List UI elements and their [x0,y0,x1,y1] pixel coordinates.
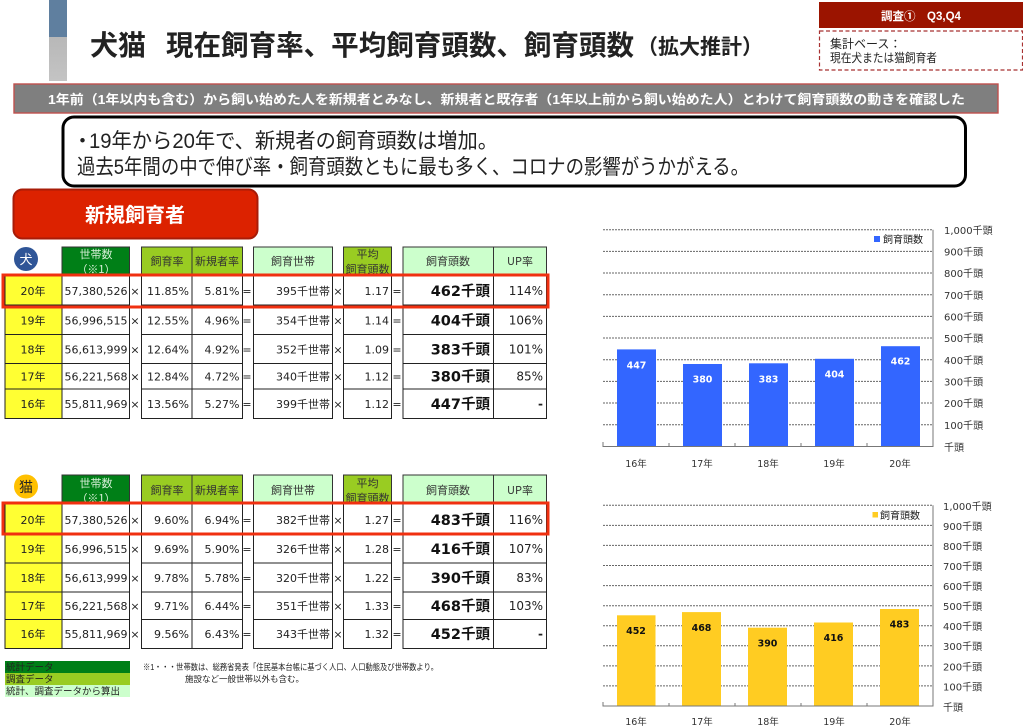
dog chart legend [874,233,923,246]
cat row 19年: 56,996,515 [65,543,128,556]
cat table header labels: 飼育世帯 [271,482,315,498]
dog row 20年: 20年 [20,284,46,298]
cat row 18年: = [242,572,252,585]
dog row 17年: × [130,370,140,384]
dog row 19年: 4.96% [205,314,240,328]
dog row 16年: 1.12 [364,398,389,411]
cat row 18年: 18年 [20,571,46,585]
cat row 20年: 57,380,526 [65,514,128,527]
dog table header labels [76,246,533,277]
dog row 16年: × [333,398,343,411]
dog row 19年: × [333,314,343,328]
cat table header labels: 新規者率 [195,482,239,498]
cat row 16年: = [392,628,402,641]
cat row 19年: 19年 [20,542,46,556]
dog row 16年 [20,396,543,413]
cat row 19年: × [130,543,140,556]
dog x axis labels: 18年 [757,458,779,470]
dog row 17年: 85% [516,370,543,384]
dog row 18年: 101% [509,342,543,356]
dog row 19年: 404千頭 [431,312,490,330]
cat table header labels: UP率 [507,482,533,498]
dog y axis labels: 1,000千頭 [944,225,993,237]
dog 2020 highlight [3,275,548,307]
dog y axis labels: 400千頭 [944,355,983,367]
decorative title strip [49,0,67,81]
cat table header labels: （※1） [76,490,116,506]
dog row 19年: 354千世帯 [276,314,330,328]
dog row 20年: × [130,285,140,298]
cat row 20年: 382千世帯 [276,514,330,527]
cat y axis labels: 200千頭 [943,662,982,674]
dog row 20年: 462千頭 [431,283,490,300]
cat row 19年: × [333,543,343,556]
legend: data source colours: 統計、調査データから算出 [6,686,120,698]
cat row 19年: 107% [509,542,543,556]
cat table cells [5,504,546,648]
title: 現在飼育率、平均飼育頭数、飼育頭数 [166,30,634,61]
cat bar values [626,620,909,650]
heading: new owners: 新規飼育者 [85,204,185,227]
cat bars [617,609,919,706]
dog x axis labels: 16年 [625,458,647,470]
cat row 16年: - [538,627,543,641]
dog y axis labels: 200千頭 [944,398,983,410]
cat row 19年 [20,541,543,558]
survey tag [819,2,1023,28]
cat row 20年: 20年 [20,513,46,527]
dog row 16年: = [392,398,402,411]
cat row 18年: 83% [516,571,543,585]
cat chart grid [603,505,933,686]
icon: cat badge [14,474,38,498]
cat row 19年: = [392,543,402,556]
dog row 19年: 12.55% [147,314,189,328]
survey tag: 調査① Q3,Q4 [881,9,962,23]
cat row 20年: 1.27 [364,514,389,527]
aggregation base box: 集計ベース： [830,36,901,51]
dog row 20年: 114% [509,284,543,298]
dog row 19年 [20,312,543,330]
cat y axis labels: 500千頭 [943,601,982,613]
cat row 18年: 320千世帯 [276,572,330,585]
dog row 16年: 447千頭 [431,396,490,413]
dog table header labels: 平均 [356,246,378,262]
dog row 18年: 12.64% [147,344,189,356]
bar chart: dogs [603,225,993,470]
dog table header labels: 飼育世帯 [271,253,315,269]
cat x axis labels [625,716,911,726]
aggregation base box: 現在犬または猫飼育者 [830,50,937,65]
dog row 17年: 12.84% [147,370,189,384]
dog row 19年: 1.14 [364,314,389,328]
dog chart grid [603,230,933,425]
cat bar values: 416 [824,633,844,644]
cat row 20年: × [333,514,343,527]
dog row 18年 [20,342,543,358]
cat row 17年: 103% [509,599,543,613]
dog row 19年: = [242,314,252,328]
cat row 16年: 452千頭 [431,626,490,643]
dog y axis labels: 900千頭 [944,246,983,258]
cat row 18年: 9.78% [154,572,189,585]
dog row 18年: 18年 [20,342,46,356]
dog row 18年: = [392,344,402,356]
dog y axis labels: 100千頭 [944,420,983,432]
cat row 18年: 5.78% [205,572,240,585]
dog y axis labels: 700千頭 [944,290,983,302]
legend: data source colours: 調査データ [6,674,54,686]
dog row 18年: × [130,344,140,356]
cat row 18年: × [130,572,140,585]
cat row 16年: = [242,628,252,641]
dog table header labels: 飼育率 [150,253,184,269]
cat row 20年 [20,512,543,529]
dog row 17年: × [333,370,343,384]
cat row 17年: 6.44% [205,600,240,613]
dog row 17年 [20,368,543,386]
dog table headers [62,247,546,275]
dog row 18年: 56,613,999 [65,344,128,356]
cat row 17年: 1.33 [364,600,389,613]
dog table header labels: （※1） [76,261,116,277]
cat y axis labels: 700千頭 [943,561,982,573]
dog y axis labels: 千頭 [944,442,964,454]
cat row 18年: × [333,572,343,585]
cat y axis labels: 400千頭 [943,621,982,633]
dog table header labels: 飼育頭数 [426,253,470,269]
dog row 18年: 4.92% [205,344,240,356]
cat bar values: 483 [890,620,909,630]
cat row 20年: 483千頭 [431,512,490,529]
cat row 19年: 1.28 [364,543,389,556]
dog row 18年: × [333,344,343,356]
cat row 17年: 351千世帯 [276,600,330,613]
cat row 16年 [20,626,543,643]
dog table cells [5,275,546,418]
cat row 17年: = [392,600,402,613]
dog row 16年: 13.56% [147,398,189,411]
cat row 18年: = [392,572,402,585]
dog bar values: 462 [891,356,910,368]
cat row 16年: 16年 [20,627,46,641]
cat row 16年: 1.32 [364,628,389,641]
cat row 17年: 9.71% [154,600,189,613]
cat row 19年: 326千世帯 [276,543,330,556]
legend: data source colours: 統計データ [6,662,54,674]
dog row 20年: = [242,285,252,298]
dog row 16年: 399千世帯 [276,398,330,411]
dog y axis labels: 800千頭 [944,268,983,280]
cat row 19年: 9.69% [154,543,189,556]
dog x axis labels [625,458,911,470]
icon: dog badge: 犬 [19,252,33,267]
cat row 19年: 416千頭 [431,541,490,558]
cat 2020 highlight [3,503,548,534]
dog x axis labels: 20年 [889,458,911,470]
dog bar values: 447 [627,360,646,372]
cat row 17年: = [242,600,252,613]
dog bar values: 404 [825,370,845,380]
cat y axis labels [943,501,992,714]
dog table header labels: 飼育頭数 [346,261,390,277]
cat y axis labels: 300千頭 [943,641,982,653]
aggregation base box [820,31,1022,70]
dog row 16年: × [130,398,140,411]
cat row 20年: = [242,514,252,527]
footnote: 施設など一般世帯以外も含む。 [185,674,304,684]
dog row 20年 [20,283,543,300]
footnote: ※1・・・世帯数は、総務省発表「住民基本台帳に基づく人口、人口動態及び世帯数より。 [143,662,438,672]
dog row 20年: 1.17 [364,285,389,298]
dog row 16年: 55,811,969 [65,398,128,411]
heading: new owners [14,190,258,238]
icon: dog badge [14,247,38,271]
dog y axis labels: 300千頭 [944,376,983,388]
dog y axis labels: 600千頭 [944,312,983,324]
cat bar values: 452 [626,626,646,637]
callout: key finding: 19年から20年で、新規者の飼育頭数は増加。 [89,130,498,153]
dog row 18年: 352千世帯 [276,344,330,356]
dog y axis labels [944,225,993,454]
cat row 20年: 6.94% [205,514,240,527]
dog row 20年: 395千世帯 [276,285,330,298]
grey description band: 1年前（1年以内も含む）から飼い始めた人を新規者とみなし、新規者と既存者（1年以上前から飼い始めた人）とわけて飼育頭数の動きを確認した [48,92,965,107]
dog bar values: 383 [759,374,778,386]
dog row 16年: - [538,397,543,411]
cat chart legend: 飼育頭数 [880,509,920,522]
dog row 19年: 56,996,515 [65,314,128,328]
dog axes [603,230,933,446]
cat bar values: 468 [692,623,712,634]
cat y axis labels: 600千頭 [943,581,982,593]
icon: cat badge: 猫 [19,479,33,495]
dog table header labels: 新規者率 [195,253,239,269]
cat row 16年: 6.43% [205,628,240,641]
dog row 19年: = [392,314,402,328]
cat row 16年: 9.56% [154,628,189,641]
cat table headers [62,475,546,504]
cat row 17年: × [333,600,343,613]
cat y axis labels: 1,000千頭 [943,501,992,513]
title: 犬猫 [90,30,146,61]
cat table header labels: 平均 [356,475,378,491]
dog table header labels: UP率 [507,253,533,269]
dog row 16年: 5.27% [205,398,240,411]
dog row 16年: = [242,398,252,411]
cat row 18年: 56,613,999 [65,572,128,585]
cat row 18年 [20,570,543,587]
dog row 19年: × [130,314,140,328]
cat row 20年: 9.60% [154,514,189,527]
dog row 17年: 340千世帯 [276,370,330,384]
cat row 16年: 55,811,969 [65,628,128,641]
dog table header labels: 世帯数 [80,246,112,262]
cat row 18年: 1.22 [364,572,389,585]
dog row 19年: 19年 [20,314,46,328]
cat row 16年: 343千世帯 [276,628,330,641]
dog row 18年: 1.09 [364,344,389,356]
cat row 16年: × [333,628,343,641]
dog bar values: 380 [693,374,713,386]
cat row 18年: 390千頭 [431,570,490,587]
footnote [143,662,438,684]
bar chart: cats [603,501,992,726]
dog row 20年: 5.81% [205,285,240,298]
cat table header labels: 飼育頭数 [346,490,390,506]
cat row 20年: × [130,514,140,527]
dog row 17年: 56,221,568 [65,370,128,384]
dog row 19年: 106% [509,314,543,328]
cat row 17年 [20,598,543,615]
legend: data source colours [5,661,130,698]
dog x axis labels: 19年 [823,458,845,470]
dog row 17年: = [392,370,402,384]
dog row 17年: 4.72% [205,370,240,384]
cat bar values: 390 [758,638,778,650]
cat table header labels: 飼育頭数 [426,482,470,498]
cat y axis labels: 100千頭 [943,682,982,694]
cat row 19年: = [242,543,252,556]
title: （拡大推計） [637,36,763,59]
cat row 20年: = [392,514,402,527]
cat y axis labels: 800千頭 [943,541,982,553]
panel: cat table [3,474,548,648]
cat table header labels [76,475,533,506]
cat row 17年: 17年 [20,599,46,613]
dog row 17年: = [242,370,252,384]
dog bar values [627,356,910,386]
cat row 17年: × [130,600,140,613]
callout: key finding: 過去5年間の中で伸び率・飼育頭数ともに最も多く、コロナの影響がうかがえる。 [77,156,749,179]
dog x axis labels: 17年 [691,458,713,470]
cat y axis labels: 千頭 [943,702,963,714]
dog row 17年: 17年 [20,370,46,384]
dog bars [617,346,920,446]
dog row 20年: 57,380,526 [65,285,128,298]
grey description band [14,84,998,113]
dog row 20年: 11.85% [147,285,189,298]
cat y axis labels: 900千頭 [943,521,982,533]
cat row 16年: × [130,628,140,641]
dog row 20年: × [333,285,343,298]
dog chart legend: 飼育頭数 [883,233,923,246]
dog row 18年: = [242,344,252,356]
cat row 20年: 116% [509,513,543,527]
cat row 17年: 56,221,568 [65,600,128,613]
dog row 18年: 383千頭 [431,342,490,358]
cat axes [603,505,933,706]
cat row 19年: 5.90% [205,543,240,556]
dog row 17年: 1.12 [364,370,389,384]
dog row 16年: 16年 [20,397,46,411]
cat table header labels: 飼育率 [150,482,184,498]
callout: key finding [63,117,966,186]
panel: dog table [3,246,548,418]
dog y axis labels: 500千頭 [944,333,983,345]
dog row 20年: = [392,285,402,298]
cat row 17年: 468千頭 [431,598,490,615]
callout: key finding: ・ [72,130,93,153]
dog row 17年: 380千頭 [431,368,490,386]
cat table header labels: 世帯数 [80,475,112,491]
